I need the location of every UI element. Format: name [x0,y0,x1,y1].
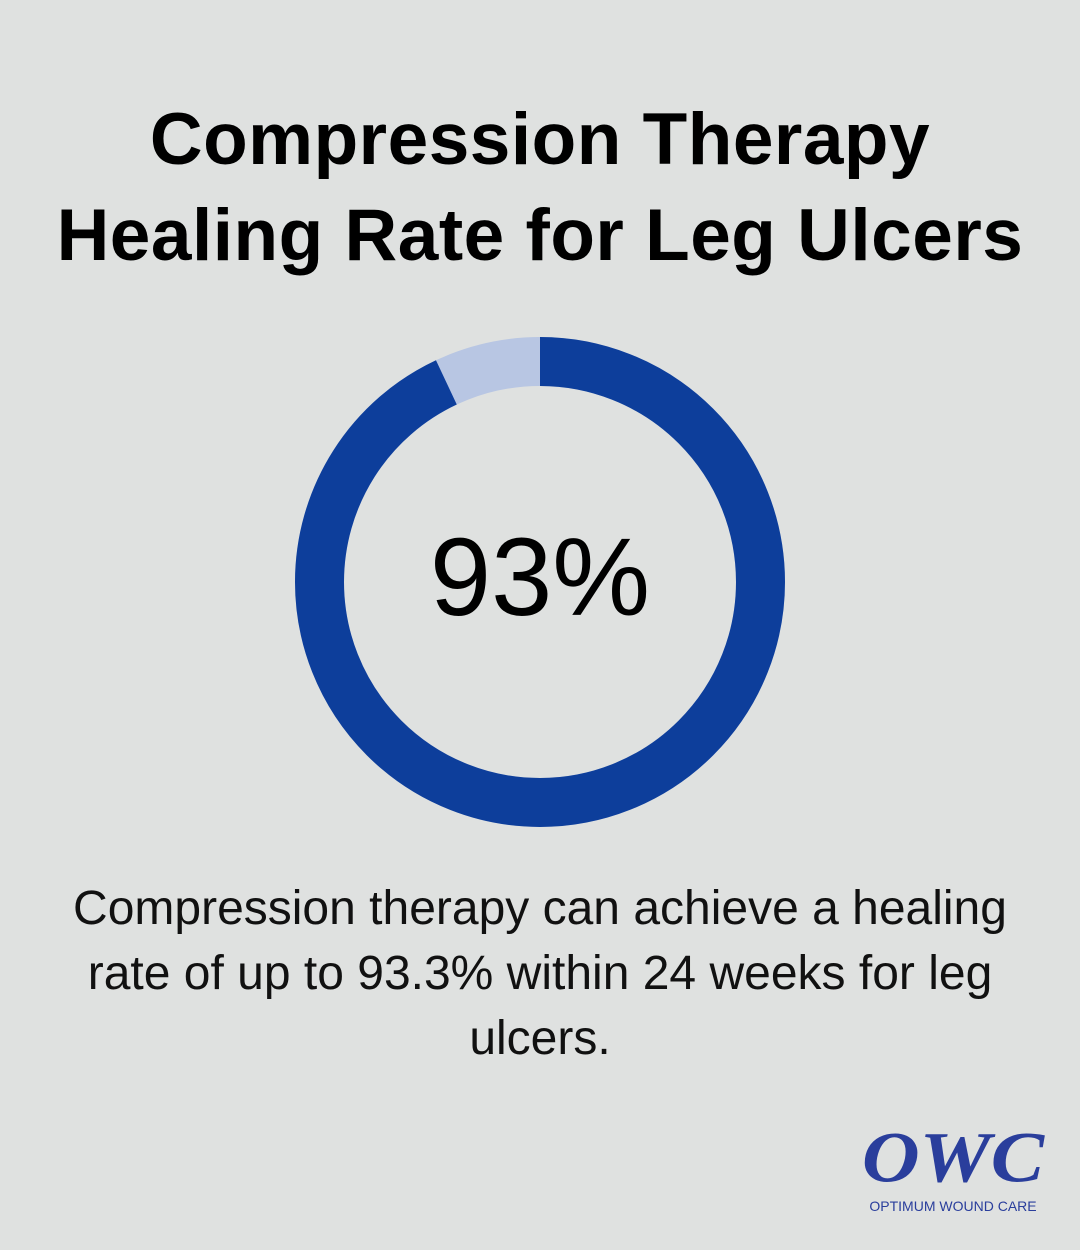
description: Compression therapy can achieve a healing rate of up to 93.3% within 24 weeks for leg ulcers. [73,882,1007,1065]
logo: OPTIMUM WOUND CARE [869,1198,1037,1214]
title: Healing Rate for Leg Ulcers [57,195,1023,276]
title: Compression Therapy [150,99,930,180]
remaining segment [320,362,760,802]
healed segment 93% [320,362,760,802]
logo: OWC [862,1118,1044,1198]
title [57,99,1023,276]
center value: 93% [430,516,650,639]
